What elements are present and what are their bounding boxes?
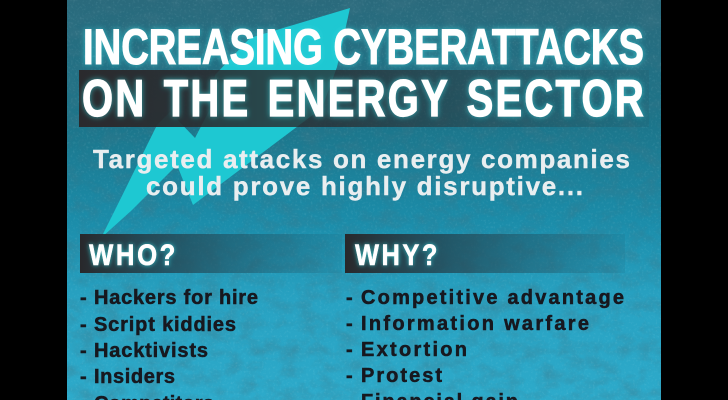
list: why: - <box>346 365 353 387</box>
panel: why <box>345 234 625 400</box>
subtitle line 1: Targeted attacks on energy companies <box>93 144 630 174</box>
list: who <box>80 287 258 400</box>
list: why: Information warfare <box>361 313 589 335</box>
list: who: Script kiddies <box>94 314 236 336</box>
heading bar: why <box>345 234 625 273</box>
list: who: - <box>80 287 87 309</box>
title bar: dark band behind second title line <box>79 70 649 127</box>
list: why <box>346 287 624 400</box>
heading: why: WHY? <box>355 239 440 272</box>
list: why: - <box>346 339 353 361</box>
list: who: - <box>80 340 87 362</box>
panel: who <box>80 234 342 400</box>
subtitle line 2: could prove highly disruptive... <box>146 171 583 201</box>
list: who: Insiders <box>94 366 175 388</box>
heading bar: who <box>80 234 342 273</box>
heading: who: WHO? <box>89 239 178 272</box>
list: why: Competitive advantage <box>361 287 624 309</box>
subtitle <box>93 144 630 201</box>
list: why: Extortion <box>361 339 467 361</box>
title <box>82 19 646 128</box>
list: who: - <box>80 314 87 336</box>
list: who: - <box>80 366 87 388</box>
icon: lightning bolt <box>101 8 350 238</box>
list: why: - <box>346 313 353 335</box>
list: why: - <box>346 287 353 309</box>
list: who: Hackers for hire <box>94 287 258 309</box>
list: why: Protest <box>361 365 442 387</box>
list: who: Hacktivists <box>94 340 208 362</box>
